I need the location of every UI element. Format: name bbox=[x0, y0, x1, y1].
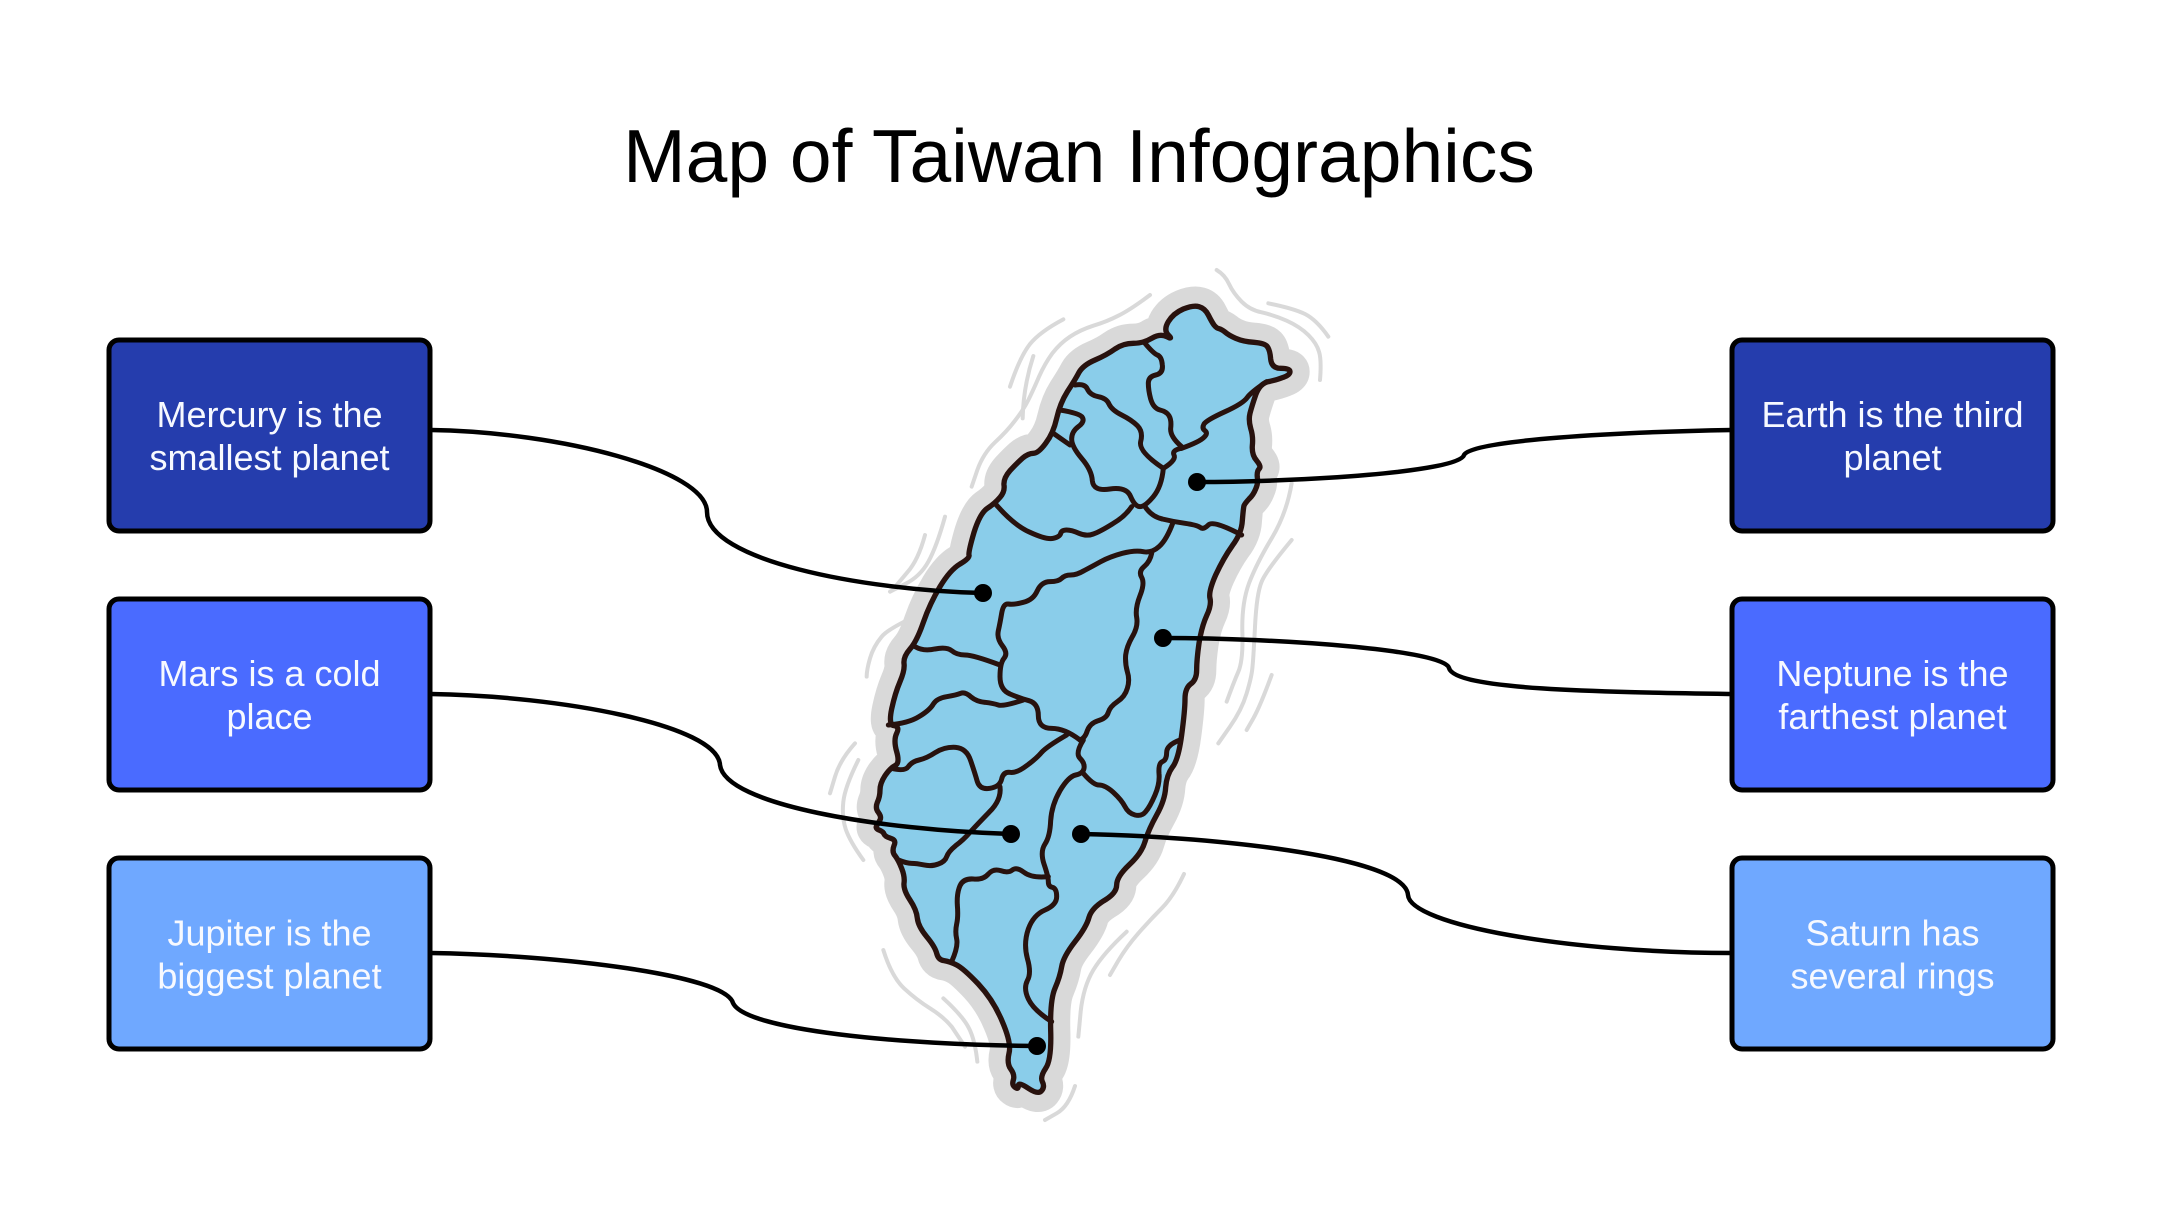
panel: Neptune bbox=[1732, 599, 2053, 790]
panel: Saturn: Saturn has bbox=[1805, 912, 1980, 954]
panel: Saturn bbox=[1732, 858, 2053, 1049]
connector lines bbox=[431, 430, 1732, 1046]
county borders bbox=[888, 343, 1267, 1022]
panel: Mercury bbox=[109, 340, 430, 531]
map of Taiwan bbox=[830, 270, 1328, 1120]
panel: Earth: planet bbox=[1843, 437, 1942, 478]
map marker dots bbox=[974, 473, 1206, 1055]
title: Map of Taiwan Infographics bbox=[623, 114, 1535, 198]
panel: Mars: Mars is a cold bbox=[158, 653, 381, 694]
panel: Mercury: Mercury is the bbox=[156, 394, 383, 435]
panel: Neptune: farthest planet bbox=[1778, 696, 2007, 737]
panel: Mercury: smallest planet bbox=[149, 437, 390, 478]
panel: Earth bbox=[1732, 340, 2053, 531]
panel: Mars: place bbox=[226, 696, 313, 737]
panel: Neptune: Neptune is the bbox=[1776, 653, 2009, 694]
panel: Earth: Earth is the third bbox=[1761, 394, 2024, 435]
gray halo bbox=[876, 306, 1290, 1092]
panel: Jupiter: biggest planet bbox=[157, 956, 382, 996]
panel: Jupiter: Jupiter is the bbox=[167, 912, 372, 954]
panel: Saturn: several rings bbox=[1790, 956, 1995, 996]
island fill and coastline bbox=[876, 306, 1290, 1092]
panel: Jupiter bbox=[109, 858, 430, 1049]
motion lines around the island bbox=[830, 270, 1328, 1120]
panel: Mars bbox=[109, 599, 430, 790]
